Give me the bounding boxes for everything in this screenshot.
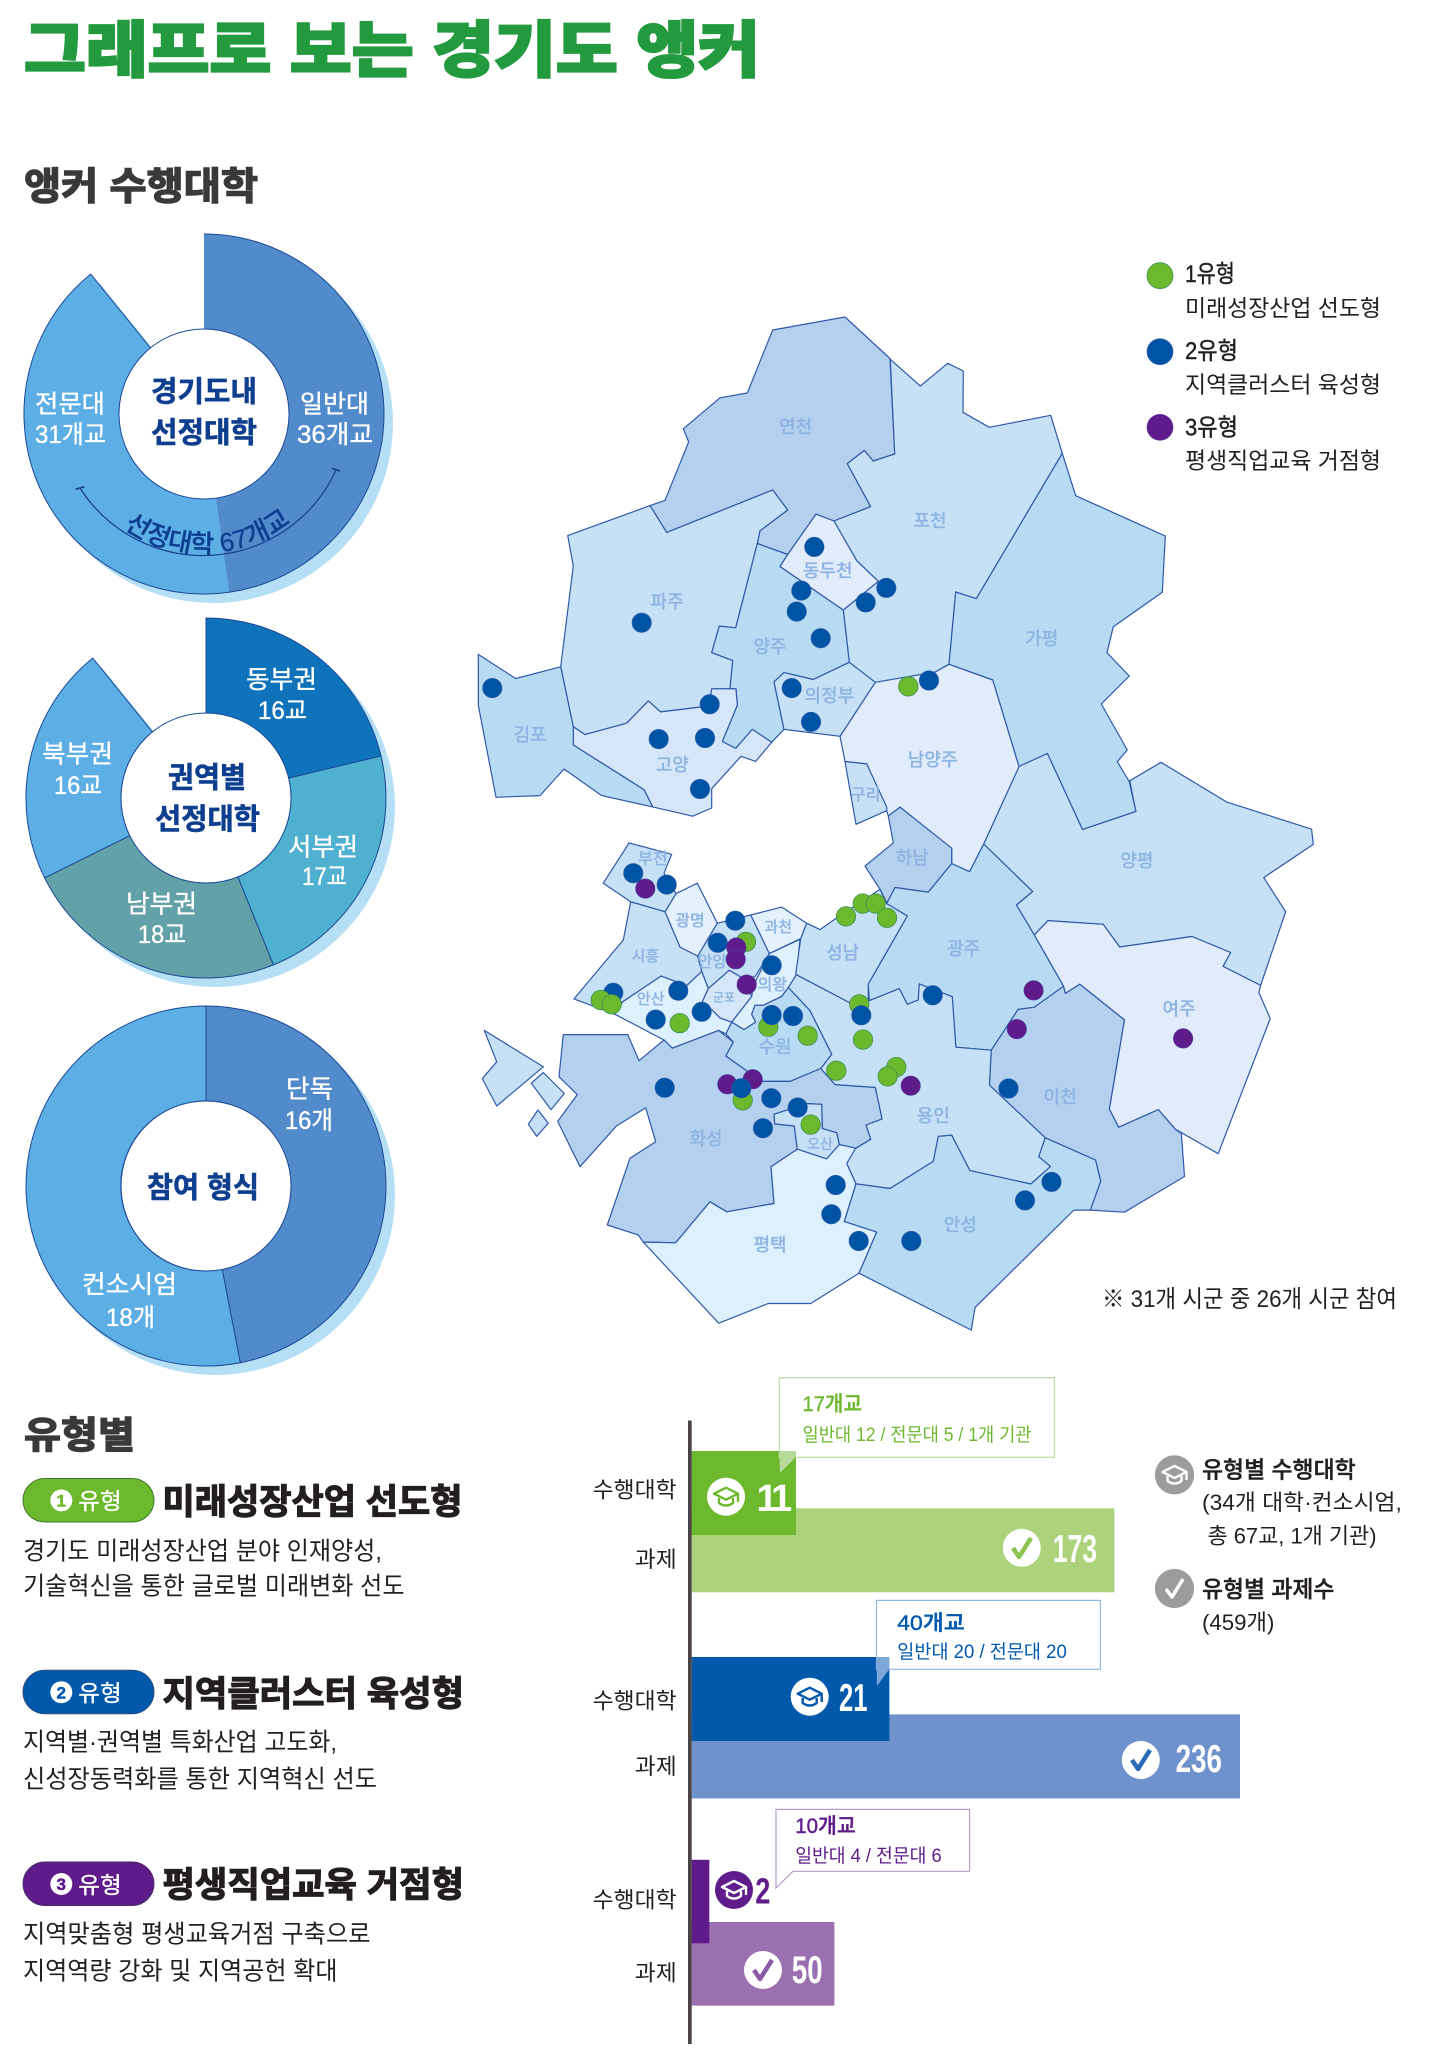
map labels: 부천 [638, 850, 667, 868]
legend: bar chart icons: (34개 대학·컨소시엄, [1202, 1490, 1402, 1515]
donut chart: participation form: 컨소시엄 [82, 1271, 177, 1299]
region: Pocheon [834, 359, 1062, 683]
legend: map dot types: 지역클러스터 육성형 [1185, 372, 1381, 398]
legend: map dot types: 평생직업교육 거점형 [1185, 448, 1381, 474]
donut chart: selected universities: 선정대학 [151, 416, 257, 450]
heading: anchor universities: 앵커 수행대학 [24, 166, 258, 208]
donut chart: by region: 서부권 [288, 834, 358, 862]
map labels: 하남 [896, 848, 929, 868]
donut chart: participation form: 18개 [106, 1304, 155, 1332]
region: Gwacheon [751, 907, 807, 954]
donut chart: participation form: 단독 [286, 1076, 333, 1104]
bar chart: type 3 [593, 1860, 834, 2006]
bar chart: type 1: 11 [756, 1478, 792, 1520]
donut chart: by region: 북부권 [42, 740, 113, 768]
legend: map dot types: 1유형 [1185, 261, 1235, 288]
type 3 block: 지역맞춤형 평생교육거점 구축으로 [23, 1920, 370, 1948]
map labels: 화성 [689, 1129, 723, 1149]
region: Uijeongbu [774, 662, 875, 736]
region: Anyang [698, 915, 769, 989]
region: Yeoncheon [650, 317, 895, 554]
type 3 block: 평생직업교육 거점형 [162, 1866, 464, 1905]
region: Yangpyeong [984, 754, 1313, 985]
region: Suwon [726, 988, 832, 1081]
map of Gyeonggi-do [478, 317, 1313, 1330]
region: Yangju [712, 544, 849, 748]
type 1 block [23, 1478, 462, 1600]
type 2 block [23, 1670, 464, 1794]
map labels: 시흥 [631, 948, 659, 965]
bar chart: type 1: 과제 [635, 1547, 677, 1572]
donut chart: selected universities: 일반대 [300, 390, 369, 418]
bar chart: type 2: 수행대학 [593, 1688, 677, 1714]
region: Guri [845, 762, 887, 824]
map labels: 안성 [944, 1215, 977, 1235]
type 2 block: 유형 [78, 1680, 122, 1706]
heading: by type: 유형별 [24, 1415, 135, 1456]
legend: map dot types: 미래성장산업 선도형 [1185, 295, 1381, 321]
region: Pyeongtaek [643, 1145, 877, 1323]
map labels: 광주 [947, 939, 980, 959]
donut chart: participation form: 16개 [285, 1107, 333, 1135]
region: Gapyeong [949, 453, 1165, 830]
bar chart: type 3: 50 [792, 1949, 823, 1992]
region: Icheon [990, 984, 1184, 1212]
region: Osan [774, 1104, 839, 1159]
donut chart: selected universities [23, 234, 393, 603]
type 1 block: 기술혁신을 통한 글로벌 미래변화 선도 [23, 1572, 404, 1600]
icon: check [1003, 1529, 1041, 1567]
legend: map dot types [1147, 261, 1381, 474]
map labels: 군포 [713, 990, 735, 1004]
callout: type 3 schools [776, 1809, 970, 1888]
type 2 block: 신성장동력화를 통한 지역혁신 선도 [23, 1766, 377, 1794]
donut chart: selected universities: 선정대학 67개교 [127, 508, 290, 555]
map dots: type 1 [591, 677, 918, 1134]
type 1 block: 유형 [78, 1488, 122, 1514]
map dots: overlapping type 2 on top [732, 1005, 871, 1098]
map labels: 수원 [758, 1037, 792, 1057]
legend: bar chart icons: 유형별 수행대학 [1202, 1456, 1356, 1482]
map dots: type 3 [636, 879, 1193, 1095]
region: Gwangmyeong [665, 883, 717, 956]
bar chart: type 2 [593, 1657, 1240, 1798]
icon: check [1122, 1741, 1160, 1779]
region: Yeoju [1034, 921, 1270, 1154]
region: Dongducheon [780, 514, 878, 610]
map labels: 용인 [917, 1106, 950, 1126]
map dots: type 2 [483, 537, 1061, 1251]
legend: bar chart icons [1155, 1455, 1402, 1635]
map labels: 안산 [637, 991, 665, 1008]
type 2 block: 2 [56, 1683, 66, 1702]
bar chart: type 2: 21 [839, 1677, 868, 1720]
bar chart: type 3: 2 [755, 1870, 770, 1912]
islands [482, 1030, 564, 1136]
callout: type 1 schools: 17개교 [802, 1393, 862, 1416]
map labels: 의왕 [758, 976, 787, 994]
type 3 block: 유형 [78, 1872, 122, 1898]
bar chart: type 1: 173 [1053, 1528, 1097, 1571]
type 2 block: 지역별·권역별 특화산업 고도화, [23, 1729, 337, 1757]
bar chart: type 1 [593, 1451, 1114, 1592]
bar chart: type 1: 수행대학 [593, 1478, 677, 1502]
icon: graduation cap [715, 1871, 753, 1909]
legend: bar chart icons: 유형별 과제수 [1202, 1576, 1334, 1602]
map labels: 고양 [656, 755, 689, 775]
donut chart: by region: 17교 [302, 863, 347, 891]
donut chart: participation form: 참여 형식 [147, 1172, 259, 1204]
icon: graduation cap [707, 1478, 745, 1516]
callout: type 3 schools: 일반대 4 / 전문대 6 [795, 1845, 942, 1867]
donut chart: by region: 남부권 [126, 890, 197, 918]
bar chart axis [688, 1420, 692, 2044]
callout: type 2 schools: 일반대 20 / 전문대 20 [897, 1641, 1067, 1663]
donut chart: selected universities: 36개교 [297, 421, 373, 449]
map labels: 의정부 [804, 686, 854, 706]
type 3 block: 3 [56, 1875, 66, 1894]
donut chart: by region: 16교 [258, 697, 307, 725]
region: Namyangju [840, 664, 1019, 872]
donut chart: selected universities: 31개교 [35, 421, 106, 449]
map labels: 이천 [1044, 1087, 1077, 1107]
callout: type 1 schools [779, 1378, 1054, 1473]
bar chart: type 2: 236 [1176, 1738, 1222, 1781]
legend: bar chart icons: (459개) [1202, 1610, 1274, 1635]
type 1 block: 미래성장산업 선도형 [162, 1483, 462, 1522]
callout: type 1 schools: 일반대 12 / 전문대 5 / 1개 기관 [802, 1424, 1032, 1446]
map labels: 광명 [675, 912, 705, 930]
legend: map dot types: 2유형 [1185, 338, 1238, 365]
region: Gwangju [868, 844, 1064, 1050]
map labels [513, 417, 1196, 1255]
type 1 block: 1 [56, 1492, 66, 1510]
map labels: 포천 [913, 511, 947, 531]
icon: grey graduation cap [1155, 1455, 1194, 1494]
map labels: 동두천 [803, 561, 853, 581]
bar chart: type 3: 수행대학 [593, 1888, 677, 1912]
donut chart: by region: 18교 [138, 921, 186, 949]
map labels: 여주 [1162, 999, 1196, 1019]
region: Seongnam [796, 889, 907, 1003]
icon: graduation cap [791, 1678, 829, 1716]
region: Bucheon [603, 843, 676, 912]
map labels: 남양주 [908, 750, 958, 770]
donut chart: by region: 권역별 [168, 762, 246, 794]
donut chart: by region: 16교 [54, 772, 102, 800]
region: Hwaseong [558, 1030, 882, 1243]
map labels: 평택 [753, 1235, 787, 1255]
donut chart: selected universities: 전문대 [35, 390, 105, 418]
region: Siheung [574, 902, 702, 1014]
map labels: 오산 [807, 1136, 833, 1152]
callout: type 2 schools: 40개교 [897, 1612, 965, 1635]
donut chart: by region: 동부권 [246, 666, 317, 694]
donut chart: selected universities: 경기도내 [151, 376, 257, 408]
donut chart: by region [26, 618, 395, 987]
icon: check [744, 1951, 782, 1989]
legend: map dot types: 3유형 [1185, 414, 1238, 442]
map labels: 안양 [698, 953, 727, 971]
map labels: 성남 [826, 943, 859, 963]
region: Gimpo [478, 654, 653, 807]
callout: type 3 schools: 10개교 [795, 1815, 856, 1838]
map labels: 파주 [651, 592, 684, 612]
note: participating municipalities: ※ 31개 시군 중 26개 시군 참여 [1102, 1286, 1397, 1313]
region: Gunpo [701, 970, 752, 1022]
region: Goyang [573, 689, 772, 816]
bar chart: type 2: 과제 [635, 1754, 677, 1779]
legend: bar chart icons: 총 67교, 1개 기관) [1208, 1524, 1376, 1548]
donut chart: participation form [26, 1006, 395, 1375]
callout: type 2 schools [876, 1600, 1100, 1686]
type 2 block: 지역클러스터 육성형 [162, 1675, 464, 1714]
region: Hanam [865, 807, 952, 903]
icon: grey check [1155, 1569, 1194, 1608]
region: Yongin [788, 974, 1050, 1188]
region: Uiwang [732, 939, 800, 1030]
region: Paju [561, 490, 788, 735]
map labels: 양주 [753, 637, 787, 657]
map labels: 구리 [851, 786, 880, 804]
bar chart: type 3: 과제 [635, 1960, 677, 1986]
title: 그래프로 보는 경기도 앵커 [24, 16, 760, 84]
region: Ansan [615, 971, 732, 1048]
type 3 block: 지역역량 강화 및 지역공헌 확대 [23, 1957, 338, 1985]
donut chart: by region: 선정대학 [155, 803, 260, 836]
map labels: 과천 [764, 919, 792, 936]
map labels: 김포 [513, 725, 547, 745]
map labels: 연천 [779, 417, 812, 437]
map labels: 양평 [1120, 851, 1153, 871]
region: Anseong [844, 1135, 1101, 1330]
map labels: 가평 [1025, 629, 1058, 649]
type 3 block [23, 1862, 464, 1985]
type 1 block: 경기도 미래성장산업 분야 인재양성, [23, 1538, 382, 1566]
